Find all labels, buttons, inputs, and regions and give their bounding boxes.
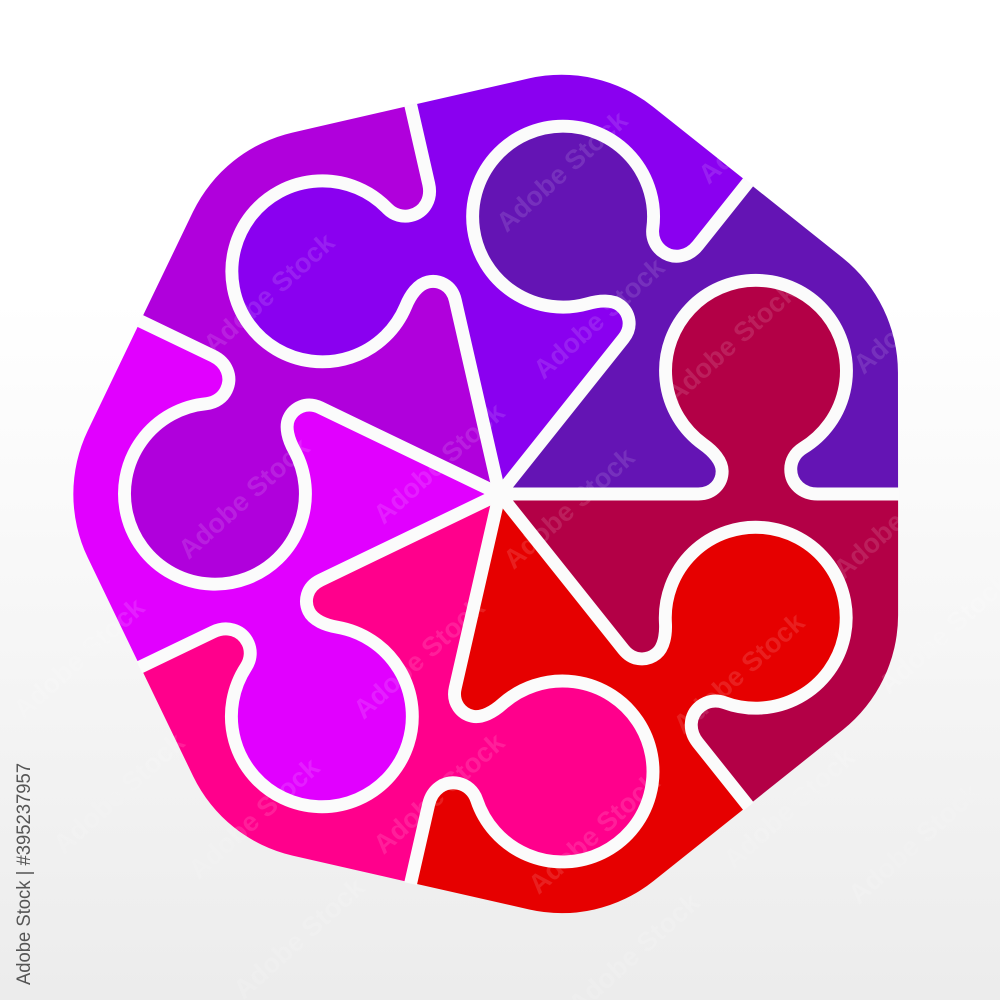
watermark: Adobe Stock [848, 246, 991, 380]
piece: purple [48, 40, 635, 686]
watermark: Adobe Stock [523, 766, 666, 900]
watermark: Adobe Stock [173, 431, 316, 565]
watermark: Adobe Stock [8, 591, 151, 725]
watermark: Adobe Stock [198, 226, 341, 360]
piece: red [256, 361, 915, 1000]
watermark: Adobe Stock [828, 451, 971, 585]
watermark: Adobe Stock [48, 726, 191, 860]
watermark: Adobe Stock [368, 726, 511, 860]
watermark: Adobe Stock [368, 396, 511, 530]
watermark: Adobe Stock [843, 776, 986, 910]
watermark: Adobe Stock [528, 251, 671, 385]
watermark: Adobe Stock [823, 101, 966, 235]
piece: violet [203, 36, 803, 542]
piece: magenta [5, 213, 592, 859]
stock id label: Adobe Stock | #395237957 [14, 763, 35, 985]
piece: crimson [500, 280, 898, 806]
watermark: Adobe Stock [660, 276, 803, 410]
watermark: Adobe Stock [33, 51, 176, 185]
watermark: Adobe Stock [348, 591, 491, 725]
watermark: Adobe Stock [498, 441, 641, 575]
watermark: Adobe Stock [693, 56, 836, 190]
watermark: Adobe Stock [491, 104, 634, 238]
watermark: Adobe Stock [718, 741, 861, 875]
white puzzle seams [47, 48, 916, 931]
piece: indigo [332, 49, 992, 688]
piece: pink [107, 425, 708, 930]
watermark: Adobe Stock [183, 751, 326, 885]
watermark: Adobe Stock [668, 606, 811, 740]
watermark: Adobe Stock [0, 261, 141, 395]
